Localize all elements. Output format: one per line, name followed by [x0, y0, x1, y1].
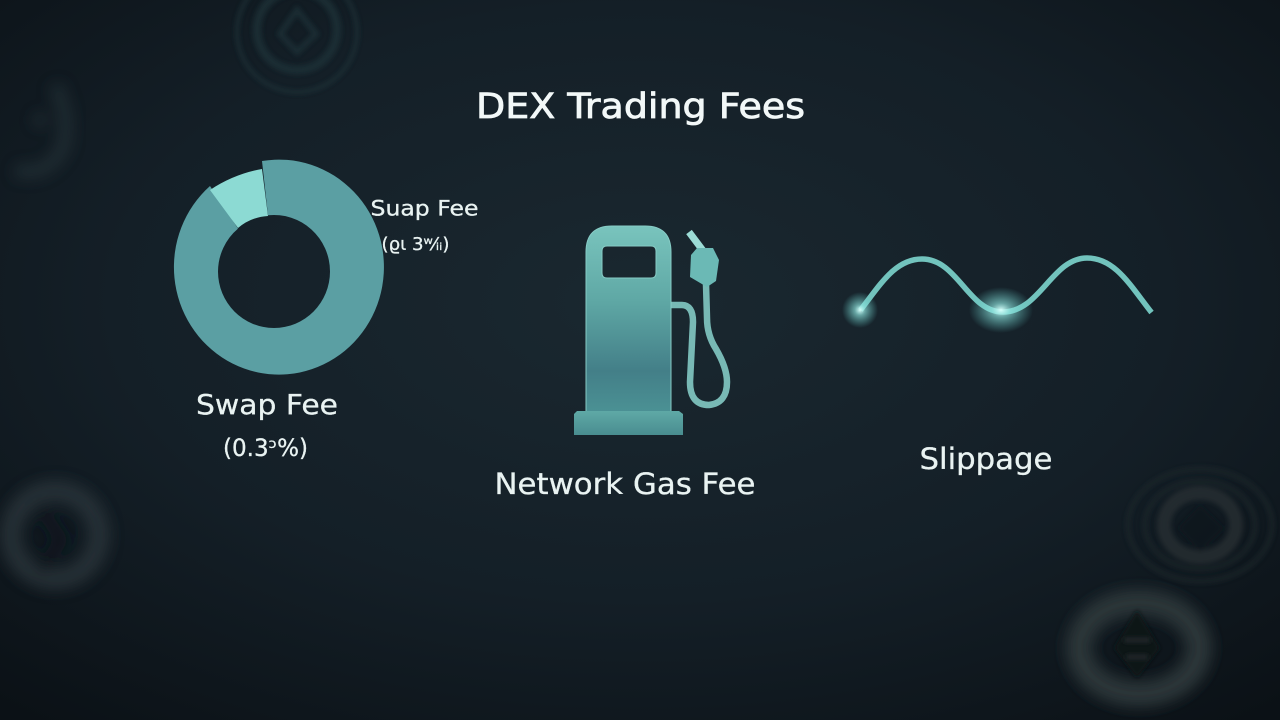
background icon: faint coin top left	[15, 85, 66, 172]
wave line	[860, 258, 1152, 312]
pump body	[586, 226, 671, 412]
pump base	[574, 411, 683, 435]
background icon: faint coin bottom left	[11, 491, 99, 579]
title: DEX Trading Fees	[476, 87, 805, 127]
panel: slippage	[842, 258, 1152, 476]
label: swap fee beside donut	[370, 196, 478, 255]
pump hose	[670, 284, 727, 405]
label: swap fee below donut: Swap Fee	[196, 388, 338, 421]
label: swap fee beside donut: (ϱι 3ʷ⁄ᵢᵢ)	[382, 235, 450, 255]
label: swap fee below donut	[196, 388, 338, 462]
label: swap fee beside donut: Suap Fee	[370, 196, 478, 220]
background icon: faint rings top	[237, 0, 357, 92]
donut chart: highlighted fee slice	[210, 169, 268, 228]
icon: gas pump	[574, 226, 727, 435]
panel: swap fee donut	[174, 160, 478, 462]
pump nozzle	[690, 248, 719, 287]
wave glow points	[842, 287, 1033, 333]
donut chart: main ring	[174, 160, 384, 375]
label: network gas fee: Network Gas Fee	[494, 467, 756, 501]
label: swap fee below donut: (0.3ᵓ%)	[223, 434, 308, 462]
icon: slippage wave	[842, 258, 1152, 333]
background icon: faint rings bottom right	[1128, 469, 1272, 581]
panel: network gas fee	[494, 226, 756, 501]
label: slippage: Slippage	[920, 442, 1052, 476]
background icon: faint coin bottom right	[1079, 602, 1199, 694]
pump nozzle tip	[689, 232, 704, 252]
